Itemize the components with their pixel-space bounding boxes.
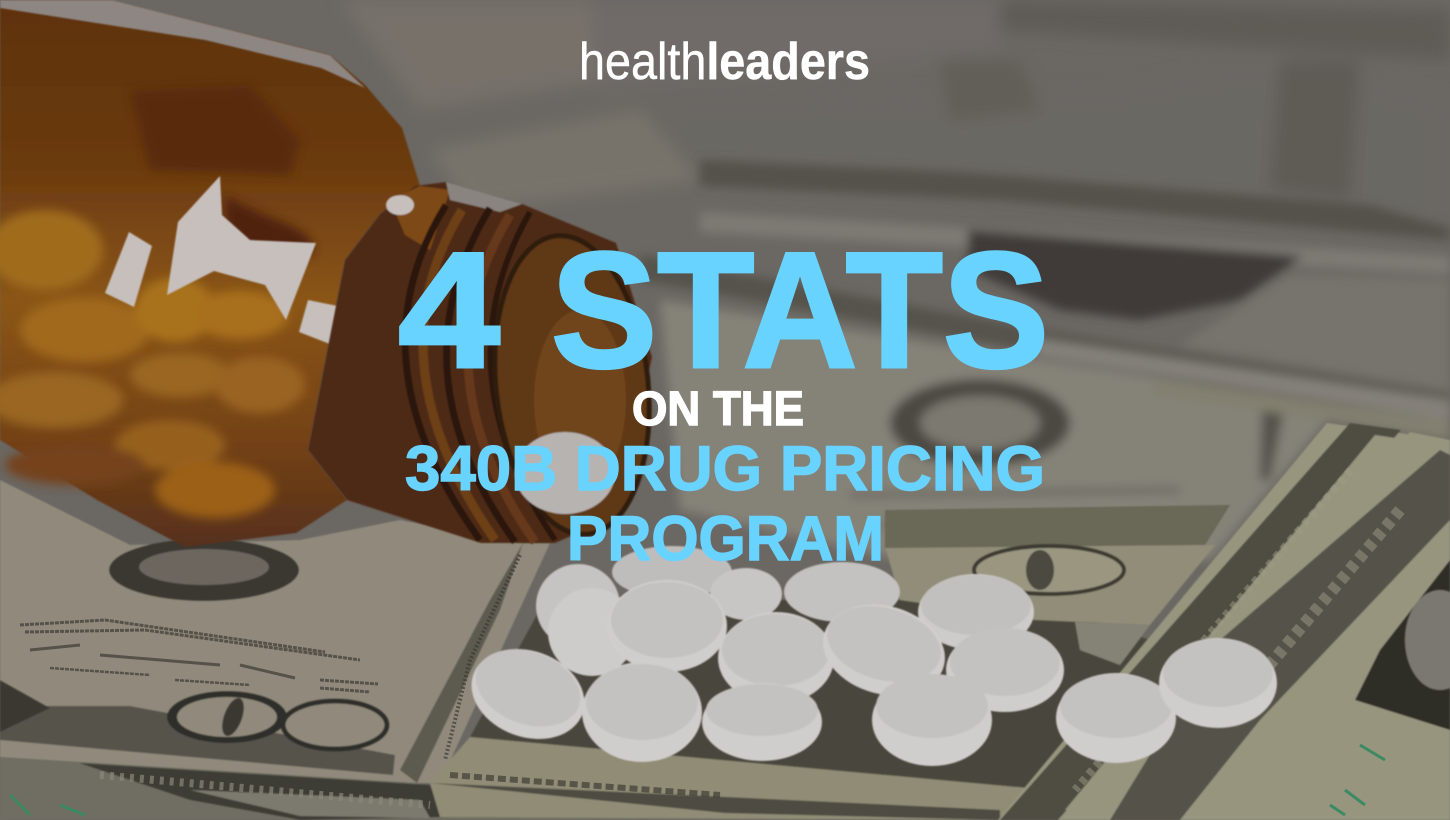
logo: healthleaders: healthleaders [579,33,870,91]
title line: 4 STATS: 4 [398,218,500,402]
seal on the 50 dollar bill [109,539,299,601]
fine print lines [20,470,1400,805]
pill [702,683,822,761]
pill [607,580,727,672]
pill [710,568,782,620]
pill bottle [0,0,663,547]
pill [872,674,992,766]
sharper lower bills [0,423,1450,820]
pill [548,588,636,676]
title line: 4 STATS: STATS [551,218,1049,402]
pills on the money [459,546,1277,766]
pill [1056,673,1176,763]
50 on the second bill [974,546,1124,594]
green serial numbers [10,745,1385,815]
pill [536,564,620,648]
pill [813,591,955,709]
title [398,218,1049,574]
pill [718,612,834,704]
bottle body [0,0,420,547]
blurred upper bills [340,0,1450,240]
pill [946,628,1064,712]
title line: PROGRAM: PROGRAM [567,504,884,574]
pill [459,634,597,754]
bottle pills inside [0,210,305,518]
title line: ON THE: ON THE [632,383,804,436]
bottle neck and threads [308,182,663,543]
bottle glare [0,0,397,357]
pill [784,562,900,622]
title line: 340B DRUG PRICING: 340B DRUG PRICING [405,434,1045,504]
dark reflections [130,85,314,255]
pill in bottle mouth [515,432,615,514]
pill [612,546,732,598]
pill [1159,638,1277,728]
pill [582,662,702,762]
pill [918,574,1034,650]
